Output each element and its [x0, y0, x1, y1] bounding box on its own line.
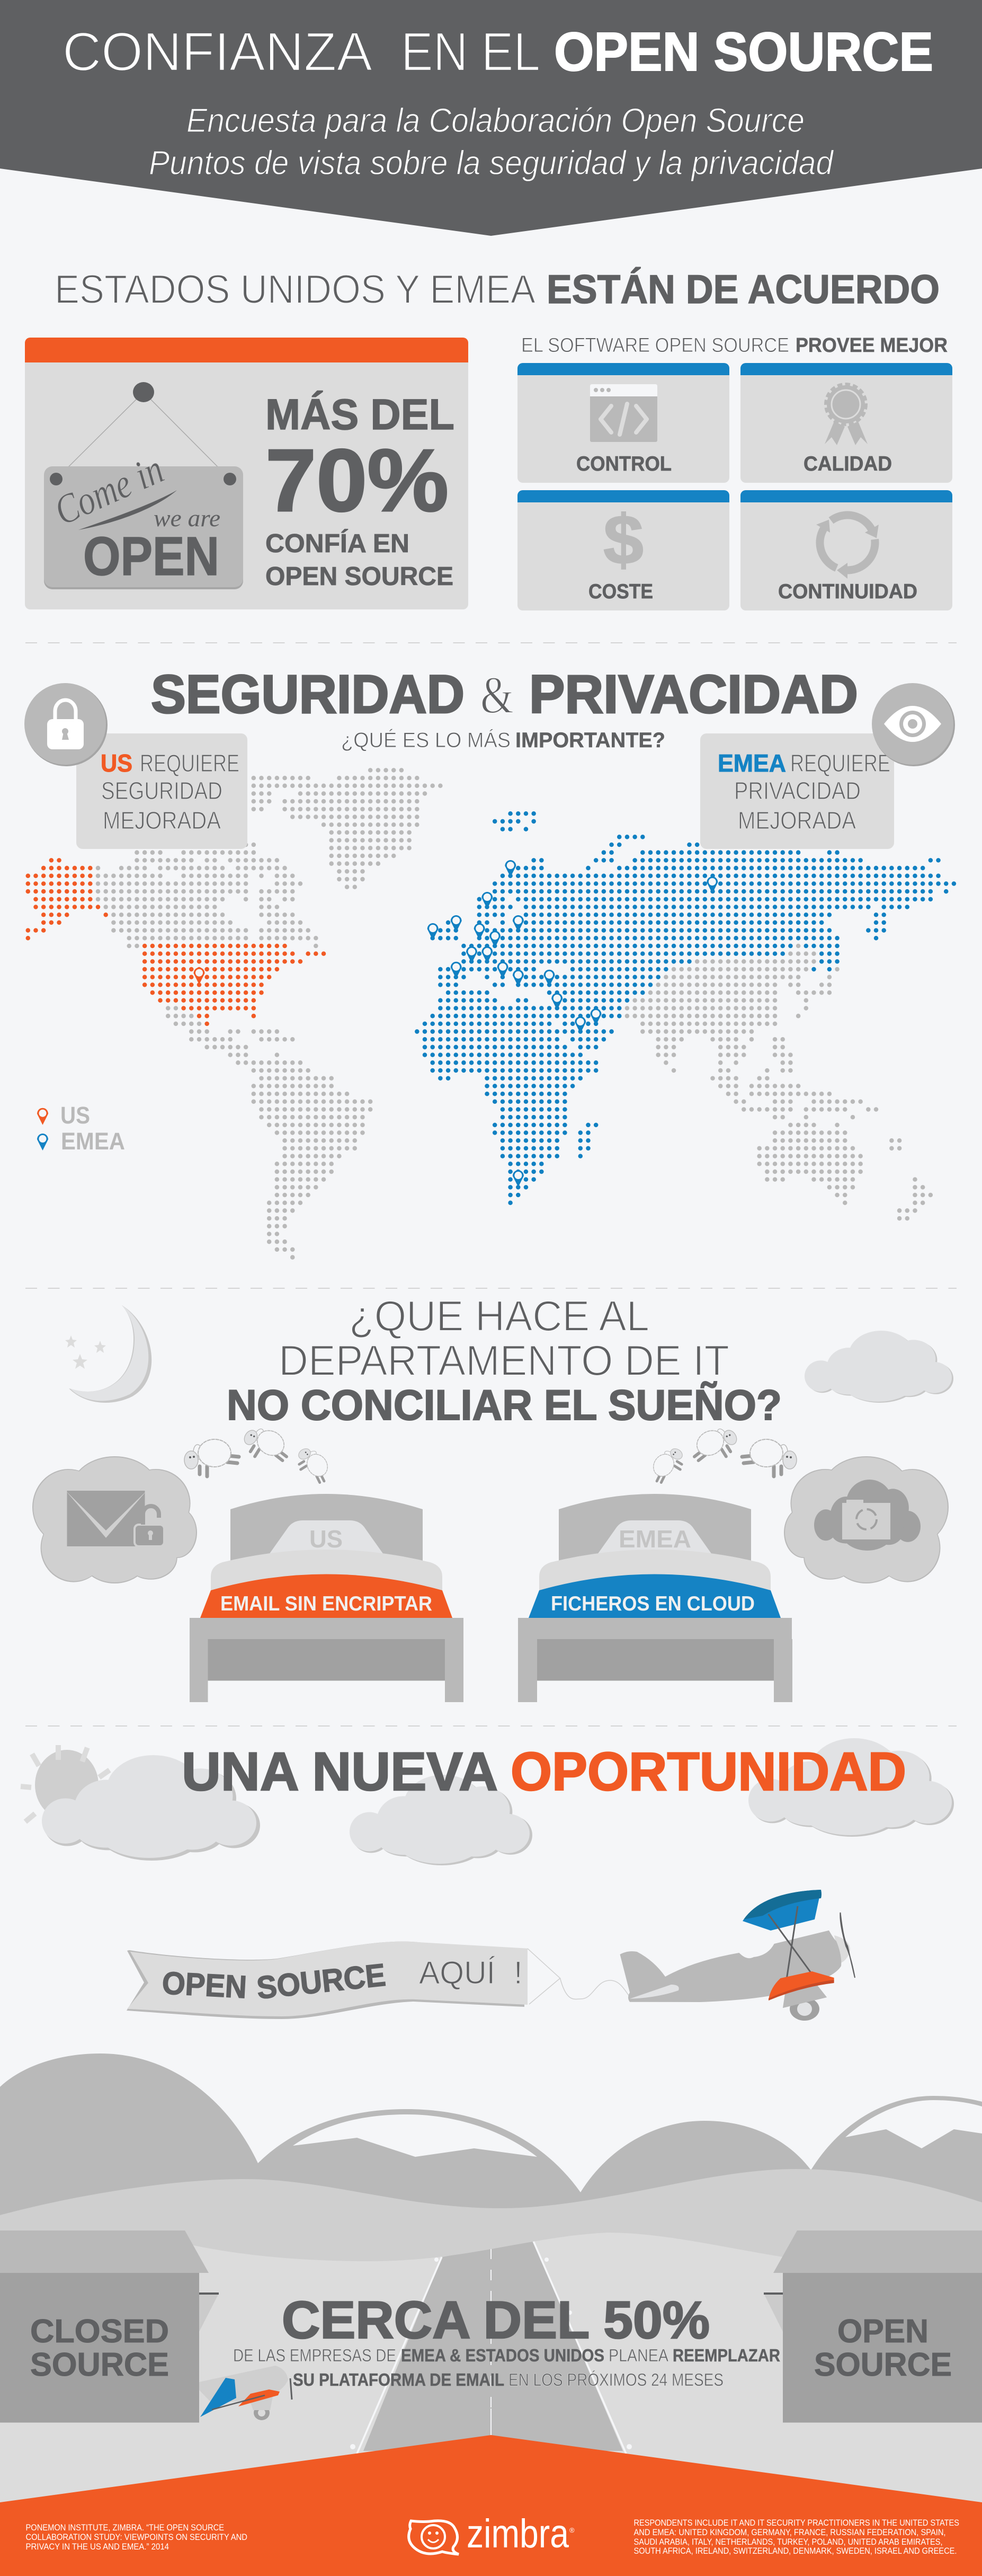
source citation: PRIVACY IN THE US AND EMEA.” 2014	[25, 2542, 169, 2552]
hills: back range	[0, 2053, 982, 2226]
legend	[37, 1102, 125, 1155]
stat text: OPEN SOURCE	[265, 562, 453, 591]
panel: 70 percent trust	[25, 338, 468, 609]
description line 2: SU PLATAFORMA DE EMAIL	[293, 2370, 504, 2389]
map pin: US	[194, 968, 204, 985]
heading: IT sleep: DEPARTAMENTO DE IT	[279, 1337, 729, 1385]
icon: biplane	[620, 1890, 855, 2021]
callout: EMEA privacy: EMEA	[718, 749, 786, 777]
sky gaps behind arches	[293, 2100, 982, 2157]
label: files in cloud: FICHEROS EN CLOUD	[551, 1592, 755, 1615]
stat text: MÁS DEL	[265, 391, 454, 439]
banner: open source here: !	[514, 1955, 523, 1990]
cloud: top right	[805, 1331, 953, 1403]
dots: EMEA blue	[417, 813, 954, 1203]
clouds: opportunity section	[42, 1738, 954, 1865]
icon: open sign: we are	[154, 504, 220, 532]
building: open source: SOURCE	[814, 2347, 952, 2383]
ground	[0, 2226, 982, 2576]
thought cloud: cloud files	[784, 1456, 949, 1583]
heading: IT sleep	[227, 1293, 782, 1429]
heading: open source provides better: EL SOFTWARE OPEN SOURCE	[521, 334, 789, 357]
title: OPEN SOURCE	[554, 21, 933, 82]
heading: new opportunity: UNA NUEVA	[182, 1741, 498, 1802]
title	[63, 21, 933, 82]
title: EN EL	[401, 21, 540, 82]
icon: envelope	[66, 1491, 147, 1546]
thought cloud: unencrypted email	[32, 1456, 197, 1583]
icon: small plane leaving hangar	[199, 2366, 292, 2420]
card: continuidad	[740, 490, 952, 610]
source citation: COLLABORATION STUDY: VIEWPOINTS ON SECURITY AND	[25, 2533, 247, 2542]
card: coste: COSTE	[588, 580, 653, 603]
description line 1	[233, 2345, 780, 2365]
legend: US	[60, 1102, 90, 1129]
icon: cloud folder	[814, 1480, 921, 1551]
callout: EMEA privacy: REQUIERE	[790, 749, 890, 777]
icon: rosette	[825, 385, 868, 445]
dots: US orange	[28, 860, 324, 1024]
heading: agreement: ESTÁN DE ACUERDO	[547, 267, 940, 312]
icon: padlock circle	[24, 683, 108, 766]
icon: open sign	[44, 382, 243, 589]
stat text	[265, 391, 454, 591]
subheading	[341, 728, 665, 752]
bed: EMEA	[518, 1494, 792, 1702]
card: control	[517, 363, 729, 483]
header banner	[0, 0, 982, 236]
subtitle: Puntos de vista sobre la seguridad y la privacidad	[149, 144, 834, 182]
hill: front	[0, 2169, 982, 2261]
title: CONFIANZA	[63, 21, 372, 82]
footer	[0, 2435, 982, 2576]
heading: new opportunity	[182, 1741, 906, 1802]
stat text: CONFÍA EN	[265, 529, 409, 558]
label: EMEA pillow: EMEA	[619, 1525, 691, 1553]
building: open source	[764, 2230, 982, 2423]
heading: security and privacy: &	[480, 666, 514, 724]
heading: security and privacy	[151, 664, 858, 752]
description line 1: DE LAS EMPRESAS DE	[233, 2345, 396, 2365]
source citation	[25, 2523, 247, 2552]
dots: Greenland and Arctic	[254, 770, 441, 887]
heading: new opportunity: OPORTUNIDAD	[511, 1741, 906, 1802]
respondents note: SAUDI ARABIA, ITALY, NETHERLANDS, TURKEY, POLAND, UNITED ARAB EMIRATES,	[633, 2537, 943, 2547]
landscape	[0, 2053, 982, 2576]
description line 2	[293, 2370, 724, 2389]
label: email without encryption: EMAIL SIN ENCRIPTAR	[220, 1592, 432, 1615]
callout: US security: REQUIERE	[140, 749, 239, 777]
icon: eye circle	[872, 683, 955, 766]
building: open source: OPEN	[837, 2313, 929, 2350]
card: calidad	[740, 363, 952, 483]
logo: zimbra: zimbra	[467, 2511, 569, 2556]
banner: open source here: OPEN	[161, 1965, 248, 2005]
callout: US security: MEJORADA	[103, 807, 221, 834]
heading: open source provides better: PROVEE MEJOR	[796, 334, 948, 357]
card: continuidad: CONTINUIDAD	[778, 580, 917, 603]
description line 1: REEMPLAZAR	[673, 2345, 780, 2365]
callout: EMEA privacy: PRIVACIDAD	[734, 777, 861, 804]
icon: cycle arrows	[816, 512, 884, 579]
icon: sun	[21, 1745, 111, 1824]
respondents note: AND EMEA: UNITED KINGDOM, GERMANY, FRANCE, RUSSIAN FEDERATION, SPAIN,	[633, 2528, 946, 2537]
heading: security and privacy: SEGURIDAD	[151, 664, 465, 724]
heading: IT sleep: ¿QUE HACE AL	[349, 1293, 649, 1340]
stat: nearly 50 percent: CERCA DEL 50%	[282, 2290, 710, 2349]
bed: US	[190, 1494, 463, 1702]
card: control: CONTROL	[576, 453, 672, 475]
heading: open source provides better	[521, 334, 948, 357]
banner: open source here: SOURCE	[255, 1957, 387, 2006]
heading: agreement: ESTADOS UNIDOS Y EMEA	[55, 267, 535, 312]
icon: open sign: OPEN	[83, 526, 219, 587]
callout: US security: US	[101, 749, 132, 777]
description line 1: PLANEA	[609, 2345, 668, 2365]
legend: EMEA	[61, 1128, 125, 1155]
heading: IT sleep: NO CONCILIAR EL SUEÑO?	[227, 1381, 782, 1429]
runway	[350, 2241, 632, 2454]
subheading: ¿QUÉ ES LO MÁS	[341, 728, 511, 752]
heading: agreement	[55, 267, 940, 312]
building: closed source	[0, 2230, 219, 2423]
card: coste	[517, 490, 729, 610]
sheep: left trio	[184, 1420, 334, 1489]
subheading: IMPORTANTE?	[515, 729, 665, 752]
callout: US security: SEGURIDAD	[101, 777, 222, 804]
callout: US security	[76, 733, 247, 849]
card: calidad: CALIDAD	[804, 453, 892, 475]
label: US pillow: US	[309, 1525, 343, 1553]
respondents note	[633, 2518, 959, 2556]
stat text: 70%	[265, 431, 449, 530]
logo: zimbra	[409, 2511, 575, 2556]
icon: open sign: Come in	[48, 446, 170, 534]
subtitle: Encuesta para la Colaboración Open Source	[186, 101, 805, 139]
building: closed source: SOURCE	[30, 2347, 169, 2383]
dots: grey countries	[98, 845, 931, 1258]
icon: open lock	[135, 1506, 164, 1546]
map pins: EMEA	[427, 860, 718, 1187]
icon: code window	[590, 384, 657, 442]
sheep: right trio	[647, 1420, 797, 1489]
logo: zimbra: ®	[569, 2526, 575, 2534]
stat: nearly 50 percent	[233, 2290, 780, 2389]
banner: open source here	[127, 1942, 630, 2019]
icon: moon and stars	[65, 1305, 151, 1403]
description line 2: EN LOS PRÓXIMOS 24 MESES	[508, 2370, 724, 2389]
building: closed source: CLOSED	[30, 2313, 169, 2350]
banner: open source here: AQUÍ	[419, 1955, 495, 1990]
icon: dollar: $	[603, 501, 644, 579]
heading: security and privacy: PRIVACIDAD	[529, 664, 858, 724]
callout: EMEA privacy: MEJORADA	[738, 807, 856, 834]
description line 1: EMEA & ESTADOS UNIDOS	[401, 2345, 604, 2365]
subtitle	[149, 101, 834, 182]
callout: EMEA privacy	[700, 733, 894, 849]
world dot map	[28, 770, 954, 1258]
source citation: PONEMON INSTITUTE, ZIMBRA. “THE OPEN SOURCE	[25, 2523, 224, 2533]
